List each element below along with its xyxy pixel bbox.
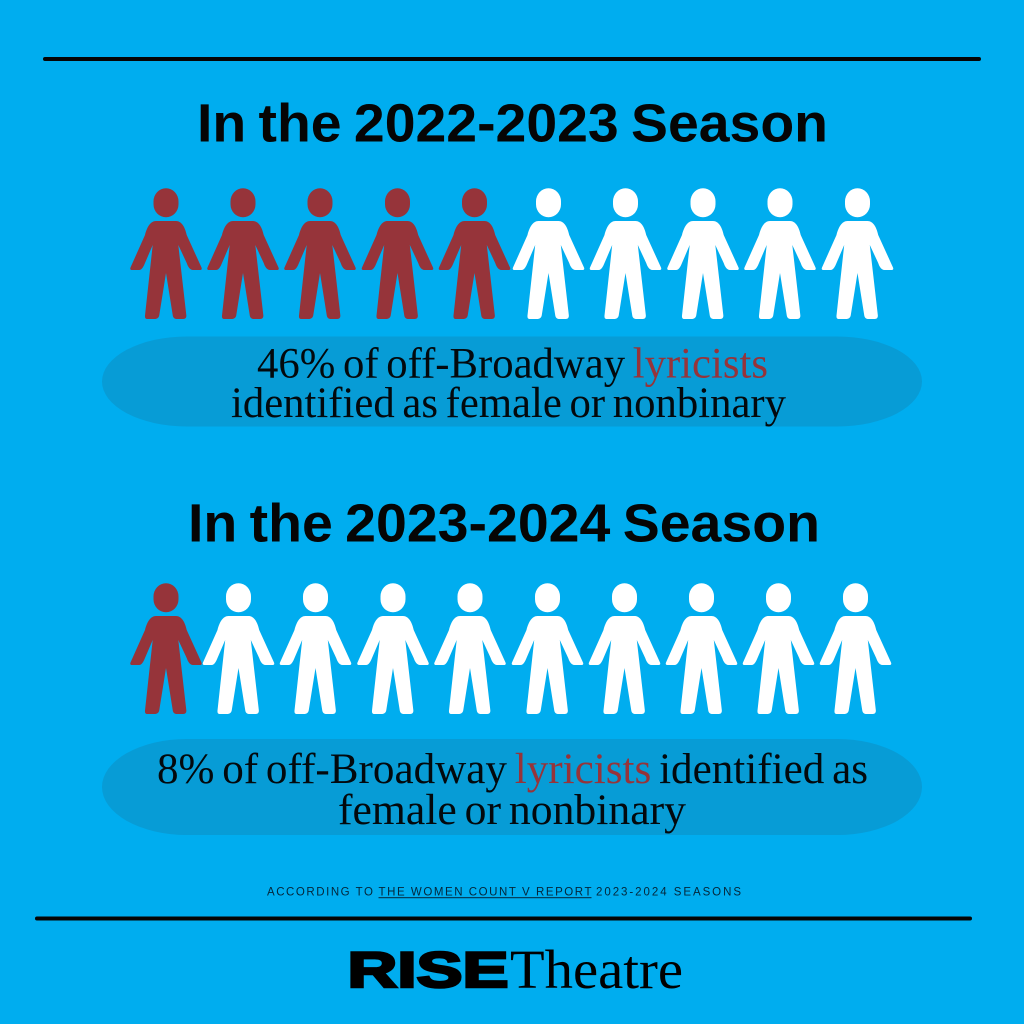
pill callout: 8% [102, 739, 922, 835]
heading: 2023-2024 season: In the 2023-2024 Season [188, 494, 820, 554]
pictogram: 2022-2023 season, 5 of 10 highlighted [130, 188, 893, 319]
source note: ACCORDING TO [267, 886, 373, 898]
pill callout: 8%: 8% of off-Broadway lyricists identified as [157, 746, 868, 793]
logo: RISE Theatre: Theatre [510, 939, 683, 1000]
heading: 2022-2023 season: In the 2022-2023 Season [197, 94, 828, 154]
pill callout: 8%: female or nonbinary [338, 787, 687, 834]
pill callout: 46%: 46% of off-Broadway lyricists [257, 340, 768, 388]
source note [267, 886, 741, 898]
logo: RISE Theatre: RISE [348, 942, 508, 998]
pictogram: 2023-2024 season, 1 of 10 highlighted [130, 583, 891, 714]
source note: THE WOMEN COUNT V REPORT [378, 886, 592, 898]
pill callout: 46%: identified as female or nonbinary [231, 380, 786, 427]
source note: 2023-2024 SEASONS [596, 886, 741, 898]
pill callout: 46% [102, 336, 922, 427]
logo: RISE Theatre [348, 939, 683, 1000]
